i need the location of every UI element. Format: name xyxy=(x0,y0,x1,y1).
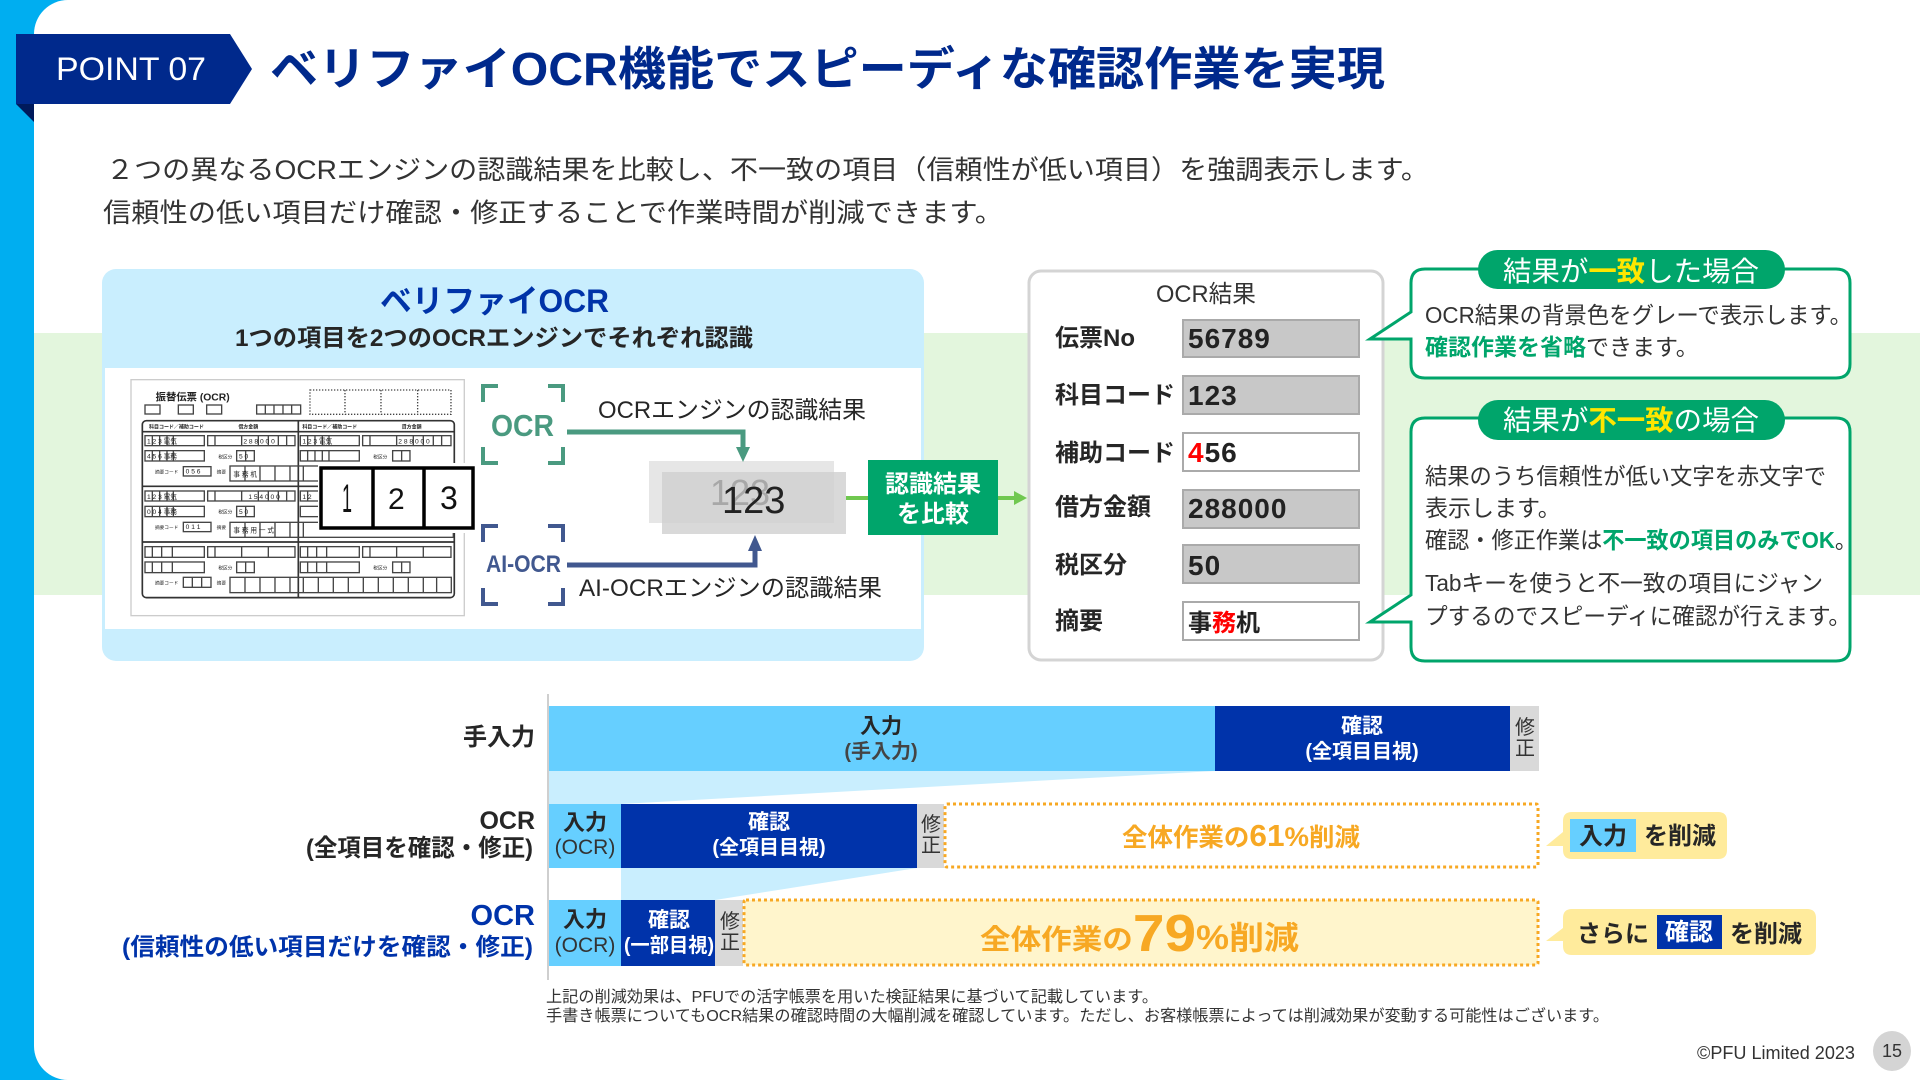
intro text: ２つの異なるOCRエンジンの認識結果を比較し、不一致の項目（信頼性が低い項目）を強調表示します。 xyxy=(106,155,1429,185)
overlapped recognition results xyxy=(649,461,846,534)
callout body: プするのでスピーディに確認が行えます。 xyxy=(1425,603,1851,629)
row: debit amount: 借方金額 xyxy=(1055,494,1151,521)
form image: transfer slip: 貸方金額 xyxy=(402,423,422,430)
results heading: OCR結果 xyxy=(1156,281,1256,308)
row 3: OCR low-confidence items: (一部目視) xyxy=(624,934,714,957)
row: tax class xyxy=(1055,545,1359,583)
labels and handwritten marks in form: 0 1 1 xyxy=(186,524,201,531)
row set 1 xyxy=(145,436,204,446)
handwritten 123 cut-out: 1 xyxy=(342,477,352,521)
row: slip number: 伝票No xyxy=(1055,325,1135,352)
labels and handwritten marks in form: 2 8 8 0 0 0 xyxy=(243,438,275,445)
labels and handwritten marks in form: 税区分 xyxy=(373,564,388,571)
row: tax class: 税区分 xyxy=(1055,552,1127,579)
intro text: 信頼性の低い項目だけ確認・修正することで作業時間が削減できます。 xyxy=(103,198,1003,228)
row 2: OCR all items: OCR xyxy=(479,807,535,835)
labels and handwritten marks in form: 摘要 xyxy=(217,524,226,531)
row: description xyxy=(1055,602,1359,640)
row: sub code: 補助コード xyxy=(1055,440,1175,467)
AI-OCR engine bracket xyxy=(483,526,563,604)
labels and handwritten marks in form: 税区分 xyxy=(218,564,233,571)
labels and handwritten marks in form: 5 0 xyxy=(239,454,249,461)
connector shapes xyxy=(549,771,1215,900)
callout body xyxy=(1425,463,1857,629)
chart: work time comparison xyxy=(122,694,1539,980)
handwritten 123 cut-out: 3 xyxy=(440,480,458,516)
row: account code xyxy=(1055,376,1359,414)
row 1: manual input: (手入力) xyxy=(844,740,918,763)
compare box: 認識結果 xyxy=(885,471,981,498)
labels and handwritten marks in form: 事 務 机 xyxy=(233,469,257,478)
row 2 saving: 61 percent xyxy=(945,804,1538,867)
labels and handwritten marks in form: 5 0 xyxy=(239,509,249,516)
AI-OCR engine bracket: AI-OCR xyxy=(486,551,561,578)
form image: transfer slip: 科目コード／補助コード xyxy=(302,423,357,430)
callout body: 表示します。 xyxy=(1425,495,1561,521)
labels and handwritten marks in form: 2 8 8 0 0 0 xyxy=(398,438,430,445)
row 3 saving: 79 percent xyxy=(744,900,1538,965)
pill heading: 結果が不一致の場合 xyxy=(1503,405,1759,436)
labels and handwritten marks in form: 税区分 xyxy=(218,509,233,516)
labels and handwritten marks in form: 事 務 用 一 式 xyxy=(233,525,274,534)
row: tax class: 50 xyxy=(1188,550,1221,581)
labels and handwritten marks in form: 摘要 xyxy=(217,468,226,475)
OCR engine bracket: OCR xyxy=(491,408,554,443)
copyright: ©PFU Limited 2023 xyxy=(1697,1043,1855,1063)
callout body: OCR結果の背景色をグレーで表示します。 xyxy=(1425,302,1852,328)
page number xyxy=(1873,1031,1911,1071)
compare box xyxy=(868,460,998,535)
pill heading xyxy=(1478,250,1785,289)
row: sub code xyxy=(1055,433,1359,471)
row 1: manual input: (全項目目視) xyxy=(1305,740,1419,763)
row 2: OCR all items: (OCR) xyxy=(555,836,615,859)
row set 3 xyxy=(145,547,204,557)
callout body: Tabキーを使うと不一致の項目にジャン xyxy=(1425,570,1823,596)
callout body: 確認・修正作業は不一致の項目のみでOK。 xyxy=(1425,527,1857,553)
callout body: 確認作業を省略できます。 xyxy=(1425,334,1699,360)
callout: confirmation also reduced xyxy=(1546,909,1816,955)
row 3 saving: 79 percent: 79 xyxy=(1133,905,1196,963)
green background band xyxy=(34,333,1920,595)
arrow: AI-OCR to result xyxy=(567,535,762,565)
row 3 saving: 79 percent: % xyxy=(1196,919,1229,957)
row: debit amount xyxy=(1055,490,1359,528)
form image: transfer slip: 振替伝票 (OCR) xyxy=(156,390,230,403)
row 2: OCR all items: 正 xyxy=(921,835,941,857)
handwritten 123 cut-out: 2 xyxy=(388,483,405,516)
form image: transfer slip xyxy=(131,380,464,616)
row 3: OCR low-confidence items: (信頼性の低い項目だけを確認・修正) xyxy=(122,934,533,961)
labels and handwritten marks in form: 1 2 3 電気 xyxy=(302,436,333,445)
callout: input reduced: 入力 xyxy=(1579,823,1627,850)
compare box: を比較 xyxy=(897,501,969,528)
row: slip number xyxy=(1055,320,1359,357)
row 2: OCR all items: 修 xyxy=(921,813,941,836)
row 3: OCR low-confidence items: 正 xyxy=(720,932,740,954)
labels and handwritten marks in form: 1 5 4 0 0 0 xyxy=(248,494,280,501)
row: description: 事務机 xyxy=(1188,610,1260,637)
labels and handwritten marks in form xyxy=(147,436,430,586)
page number: 15 xyxy=(1882,1041,1902,1061)
intro text xyxy=(103,155,1429,228)
row 3: OCR low-confidence items: 入力 xyxy=(563,907,607,932)
row 1: manual input: 確認 xyxy=(1341,715,1383,738)
row 2: OCR all items xyxy=(306,804,944,868)
row 2: OCR all items: (全項目目視) xyxy=(712,836,826,859)
row 3 saving: 79 percent: 削減 xyxy=(1229,920,1299,956)
callout: confirmation also reduced: さらに xyxy=(1577,921,1649,948)
row 2: OCR all items: 入力 xyxy=(563,810,607,835)
row 2: OCR all items: 確認 xyxy=(748,811,790,834)
pill heading: 結果が一致した場合 xyxy=(1503,256,1759,287)
row 1: manual input: 手入力 xyxy=(463,724,535,751)
labels and handwritten marks in form: 摘要 xyxy=(217,579,226,586)
green connector line xyxy=(846,491,1027,505)
handwritten 123 cut-out xyxy=(318,463,480,533)
row 1: manual input: 正 xyxy=(1515,738,1535,760)
labels and handwritten marks in form: 1 2 xyxy=(302,494,312,501)
footnote: 手書き帳票についてもOCR結果の確認時間の大幅削減を確認しています。ただし、お客様帳票によっては削減効果が変動する可能性はございます。 xyxy=(546,1006,1609,1025)
heading tag: POINT 07 xyxy=(16,34,252,122)
callout: match xyxy=(1370,250,1852,378)
label: OCR engine result: OCRエンジンの認識結果 xyxy=(598,397,866,424)
labels and handwritten marks in form: 4 5 6 事務 xyxy=(147,452,177,461)
row: slip number: 56789 xyxy=(1188,323,1271,354)
row 3 saving: 79 percent: 全体作業の xyxy=(980,924,1120,955)
row 1: manual input xyxy=(463,706,1539,771)
arrow: OCR to result xyxy=(567,432,750,462)
callout: confirmation also reduced: を削減 xyxy=(1730,921,1802,948)
footnote xyxy=(546,988,1609,1025)
callout: confirmation also reduced: 確認 xyxy=(1665,919,1713,946)
labels and handwritten marks in form: 摘要コード xyxy=(155,468,179,475)
row set 2 xyxy=(145,491,204,501)
row 2 saving: 61 percent: 全体作業の61%削減 xyxy=(1122,818,1360,853)
panel heading: ベリファイOCR xyxy=(380,283,609,319)
labels and handwritten marks in form: 摘要コード xyxy=(155,579,179,586)
row 3: OCR low-confidence items xyxy=(122,900,743,966)
pill heading xyxy=(1478,400,1785,440)
title: ベリファイOCR機能でスピーディな確認作業を実現 xyxy=(270,43,1385,95)
panel subheading: 1つの項目を2つのOCRエンジンでそれぞれ認識 xyxy=(235,325,753,352)
row 3: OCR low-confidence items: OCR xyxy=(471,900,535,932)
row 1: manual input: 修 xyxy=(1515,716,1535,739)
OCR engine bracket xyxy=(483,386,563,463)
row 3: OCR low-confidence items: (OCR) xyxy=(555,934,615,957)
labels and handwritten marks in form: 0 5 6 xyxy=(186,469,201,476)
row 2: OCR all items: (全項目を確認・修正) xyxy=(306,835,533,862)
row: account code: 科目コード xyxy=(1055,382,1175,409)
labels and handwritten marks in form: 税区分 xyxy=(218,453,233,460)
label: AI-OCR engine result: AI-OCRエンジンの認識結果 xyxy=(579,575,882,602)
row: description: 摘要 xyxy=(1055,608,1103,635)
callout: input reduced: を削減 xyxy=(1644,823,1716,850)
row: account code: 123 xyxy=(1188,380,1238,411)
row 3: OCR low-confidence items: 確認 xyxy=(648,909,690,932)
row 3: OCR low-confidence items: 修 xyxy=(720,910,740,933)
form image: transfer slip: 借方金額 xyxy=(238,423,258,430)
row: debit amount: 288000 xyxy=(1188,493,1287,524)
labels and handwritten marks in form: 1 2 3 電気 xyxy=(147,436,177,445)
row 1: manual input: 入力 xyxy=(860,715,902,738)
overlapped recognition results: 123 xyxy=(710,472,770,513)
labels and handwritten marks in form: 1 2 3 電気 xyxy=(147,492,177,501)
callout: mismatch xyxy=(1370,400,1857,661)
panel: OCR results xyxy=(1029,271,1383,660)
footnote: 上記の削減効果は、PFUでの活字帳票を用いた検証結果に基づいて記載しています。 xyxy=(546,988,1158,1006)
heading tag: POINT 07: POINT 07 xyxy=(56,51,206,87)
form image: transfer slip: 科目コード／補助コード xyxy=(149,423,204,430)
labels and handwritten marks in form: 0 0 4 事務 xyxy=(147,507,177,516)
callout: input reduced xyxy=(1546,812,1727,859)
labels and handwritten marks in form: 摘要コード xyxy=(155,524,179,531)
overlapped recognition results: 123 xyxy=(722,480,785,522)
row: sub code: 456 xyxy=(1188,437,1238,468)
callout body: 結果のうち信頼性が低い文字を赤文字で xyxy=(1425,463,1826,489)
callout body xyxy=(1425,302,1852,360)
labels and handwritten marks in form: 税区分 xyxy=(373,453,388,460)
panel: verify OCR xyxy=(102,269,1027,661)
